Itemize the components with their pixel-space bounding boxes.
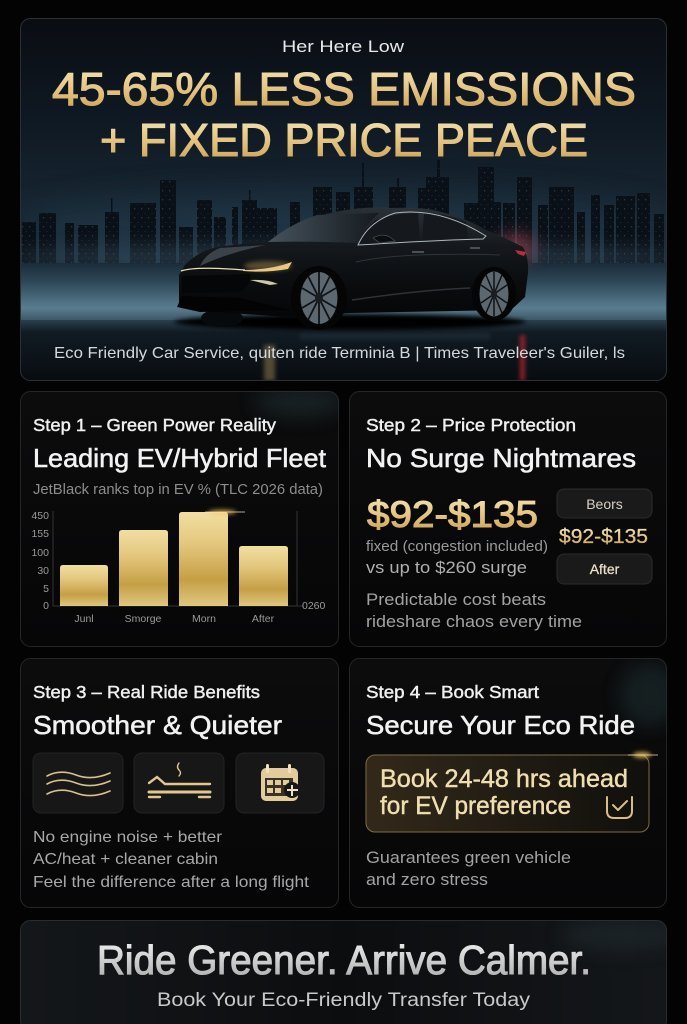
after button: After bbox=[590, 561, 620, 577]
x axis labels: After bbox=[252, 613, 275, 625]
price figure: $92-$135 bbox=[367, 494, 538, 535]
price detail: vs up to $260 surge bbox=[366, 558, 527, 577]
benefits text: AC/heat + cleaner cabin bbox=[33, 851, 218, 868]
comparison price: $92-$135 bbox=[559, 526, 648, 548]
step 4 heading: Secure Your Eco Ride bbox=[366, 710, 635, 740]
hero title bbox=[52, 63, 636, 166]
road reflections bbox=[264, 332, 525, 381]
step 3 heading: Smoother & Quieter bbox=[33, 710, 282, 740]
hero title: + FIXED PRICE PEACE bbox=[100, 114, 588, 166]
y axis labels: 5 bbox=[43, 583, 49, 595]
y axis labels: 0 bbox=[43, 600, 49, 612]
right axis label: 0260 bbox=[302, 600, 326, 612]
step 1 heading: Leading EV/Hybrid Fleet bbox=[33, 443, 327, 473]
x axis labels: Junl bbox=[74, 613, 94, 625]
y axis labels: 100 bbox=[31, 547, 49, 559]
predictable note bbox=[366, 590, 582, 631]
rear wheel bbox=[472, 267, 516, 321]
benefits text bbox=[33, 829, 310, 891]
cta heading: Ride Greener. Arrive Calmer. bbox=[97, 937, 591, 983]
cta subtext: Book Your Eco-Friendly Transfer Today bbox=[157, 990, 531, 1011]
car bbox=[174, 208, 528, 330]
red tail glow bbox=[498, 234, 534, 262]
step 4 label: Step 4 – Book Smart bbox=[366, 682, 539, 702]
icon: checkbox bbox=[607, 797, 632, 818]
x axis labels: Smorge bbox=[125, 613, 162, 625]
panel: step 3 bbox=[20, 658, 338, 908]
step 1 label: Step 1 – Green Power Reality bbox=[33, 415, 276, 435]
step 1 subtext: JetBlack ranks top in EV % (TLC 2026 data) bbox=[33, 482, 323, 498]
panel: step 2 bbox=[350, 392, 666, 646]
step 2 heading: No Surge Nightmares bbox=[366, 443, 636, 473]
before button bbox=[557, 489, 652, 518]
panel: step 1 bbox=[20, 386, 345, 646]
fog band bbox=[20, 263, 667, 323]
y axis labels: 155 bbox=[31, 528, 49, 540]
bars bbox=[60, 512, 288, 606]
sparkle bbox=[628, 752, 658, 758]
booking callout: Book 24-48 hrs ahead bbox=[380, 765, 628, 793]
road bbox=[21, 320, 666, 330]
hero panel bbox=[5, 18, 685, 381]
benefits text: Feel the difference after a long flight bbox=[33, 874, 310, 891]
after button bbox=[557, 554, 652, 584]
y axis labels: 30 bbox=[37, 565, 49, 577]
y axis labels bbox=[31, 510, 49, 612]
guarantee text bbox=[366, 848, 571, 889]
guarantee text: Guarantees green vehicle bbox=[366, 848, 571, 867]
booking callout bbox=[366, 752, 658, 832]
hero caption: Eco Friendly Car Service, quiten ride Terminia B | Times Traveleer's Guiler, ls bbox=[54, 345, 625, 362]
predictable note: Predictable cost beats bbox=[366, 590, 546, 609]
city skyline bbox=[22, 160, 664, 264]
booking callout: for EV preference bbox=[380, 792, 571, 820]
x axis labels: Morn bbox=[192, 613, 216, 625]
kicker: Her Here Low bbox=[282, 37, 405, 56]
icon: calendar bbox=[236, 753, 324, 813]
price detail bbox=[366, 539, 548, 577]
icon: seat with steam bbox=[134, 753, 224, 813]
panel: step 4 bbox=[350, 658, 680, 908]
front wheel bbox=[294, 266, 344, 330]
step 3 label: Step 3 – Real Ride Benefits bbox=[33, 682, 260, 702]
step 2 label: Step 2 – Price Protection bbox=[366, 415, 576, 435]
predictable note: rideshare chaos every time bbox=[366, 612, 582, 631]
hero title: 45-65% LESS EMISSIONS bbox=[52, 63, 636, 115]
icon: waves bbox=[33, 753, 123, 813]
panel: call to action bbox=[20, 919, 680, 1024]
price detail: fixed (congestion included) bbox=[366, 539, 548, 555]
before button: Beors bbox=[586, 496, 623, 512]
bar chart bbox=[31, 510, 326, 625]
guarantee text: and zero stress bbox=[366, 870, 488, 889]
benefits text: No engine noise + better bbox=[33, 829, 223, 846]
bar glow bbox=[205, 510, 245, 514]
y axis labels: 450 bbox=[31, 510, 49, 522]
x axis labels bbox=[74, 613, 275, 625]
